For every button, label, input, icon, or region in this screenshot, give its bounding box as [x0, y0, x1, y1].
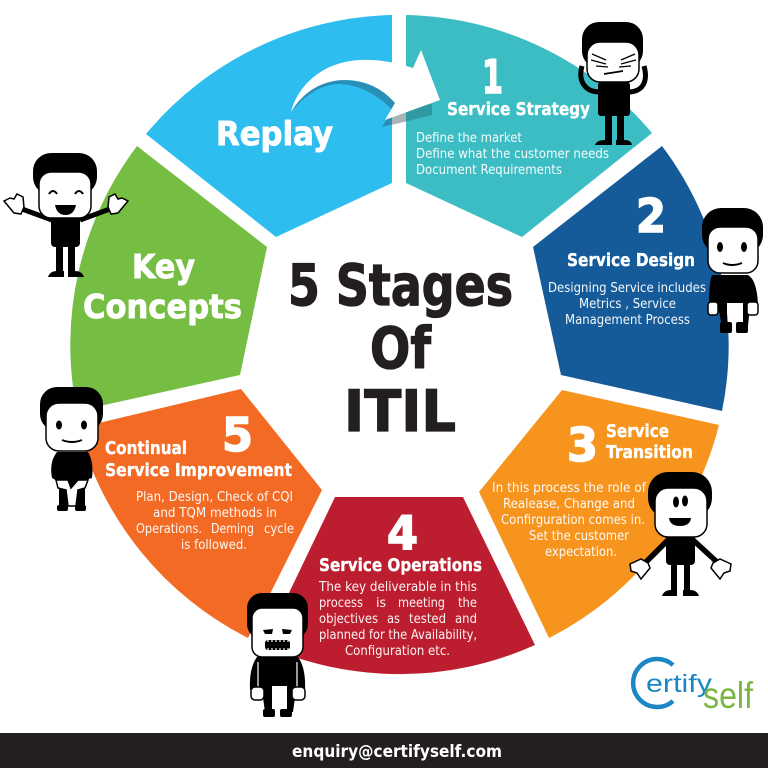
service operations heading: Service Operations [319, 556, 482, 576]
service transition body: Realease, Change and [503, 497, 635, 512]
continual service improvement body [136, 490, 294, 553]
panel: service transition [479, 390, 719, 638]
service design body: Management Process [565, 313, 690, 328]
service strategy segment [406, 15, 652, 237]
number 5: 5 [222, 408, 253, 462]
service operations body: planned for the Availability, [319, 628, 477, 643]
service transition heading [606, 422, 693, 463]
service transition segment [479, 390, 719, 638]
arrow: replay to strategy [291, 50, 440, 127]
character: angry [247, 593, 308, 717]
panel: service design [533, 146, 729, 411]
service transition heading: Transition [606, 443, 693, 463]
character: covering eyes [581, 22, 645, 145]
service transition heading: Service [606, 422, 669, 442]
service design segment [533, 146, 729, 411]
key concepts label line 2: Concepts [83, 287, 242, 326]
character: smiling [702, 208, 763, 333]
continual service improvement body: cycle [264, 522, 294, 537]
title: Of [370, 316, 432, 382]
service strategy body: Define the market [416, 131, 522, 146]
continual service improvement body: is followed. [181, 538, 247, 553]
footer bar [0, 733, 768, 768]
service strategy body [416, 131, 609, 178]
key concepts label: Key [132, 247, 195, 286]
service transition body [492, 481, 646, 560]
service transition body: In this process the role of [492, 481, 646, 496]
continual service improvement body: Operations. [136, 522, 202, 537]
logo word certify: ertify [646, 670, 713, 698]
continual service improvement heading: Service Improvement [105, 461, 292, 481]
number 4: 4 [387, 506, 418, 560]
title [288, 253, 513, 445]
service operations body [318, 580, 477, 659]
service operations segment [264, 497, 535, 674]
service strategy heading: Service Strategy [447, 100, 591, 120]
character: hands clasped [40, 387, 103, 511]
number 2: 2 [636, 189, 666, 243]
character: shrugging [630, 472, 731, 596]
service operations body: meeting [398, 596, 445, 611]
service operations body: Configuration etc. [345, 644, 450, 659]
service operations body: the [458, 596, 477, 611]
service operations body: objectives [319, 612, 378, 627]
service operations body: process [319, 596, 363, 611]
service transition body: Confirguration comes in. [501, 513, 645, 528]
footer email: enquiry@certifyself.com [292, 742, 502, 762]
service strategy body: Document Requirements [416, 163, 562, 178]
service operations body: and [455, 612, 477, 627]
panel: service operations [264, 497, 535, 674]
service operations body: as [387, 612, 400, 627]
number 3: 3 [567, 418, 598, 472]
service operations body: tested [409, 612, 446, 627]
service transition body: Set the customer [529, 529, 630, 544]
service strategy body: Define what the customer needs [416, 147, 609, 162]
service design body [548, 281, 706, 328]
panel: key concepts [4, 146, 267, 411]
continual service improvement segment [78, 389, 322, 638]
logo letter C [633, 659, 673, 707]
number 1: 1 [482, 50, 503, 104]
title: 5 Stages [288, 253, 513, 319]
panel: continual service improvement [78, 389, 322, 638]
logo word self: self [703, 675, 754, 716]
continual service improvement heading [105, 439, 292, 481]
character: arms open [4, 153, 128, 277]
title: ITIL [344, 379, 456, 445]
continual service improvement body: Deming [211, 522, 254, 537]
service operations body: The key deliverable in this [318, 580, 477, 595]
service transition body: expectation. [545, 545, 617, 560]
service design body: Metrics , Service [579, 297, 676, 312]
panel: service strategy [406, 15, 652, 237]
service operations body: is [376, 596, 386, 611]
continual service improvement heading: Continual [105, 439, 187, 459]
panel: replay [146, 15, 392, 237]
continual service improvement body: Plan, Design, Check of CQI [136, 490, 293, 505]
replay segment [146, 15, 392, 237]
service design heading: Service Design [567, 251, 695, 271]
key concepts segment [70, 146, 267, 411]
service design body: Designing Service includes [548, 281, 706, 296]
logo: certifyself [633, 659, 754, 716]
replay label: Replay [216, 114, 333, 153]
continual service improvement body: and TQM methods in [153, 506, 277, 521]
